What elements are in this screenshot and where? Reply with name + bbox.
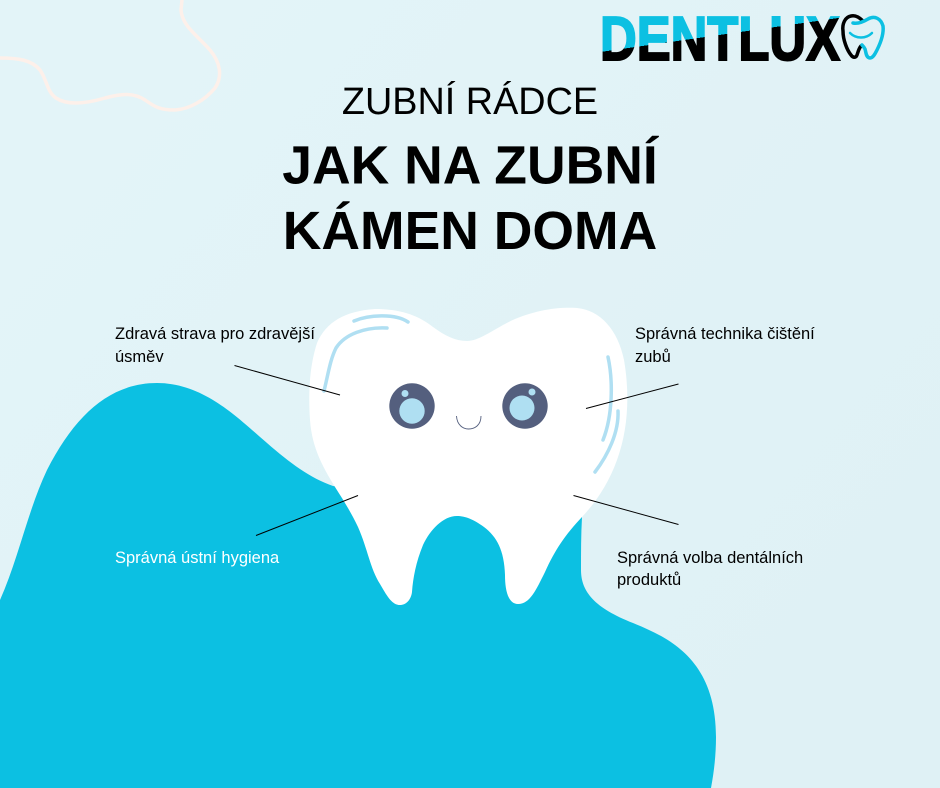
left eye (389, 383, 435, 429)
logo tooth icon (843, 16, 883, 58)
subtitle: ZUBNÍ RÁDCE (342, 81, 598, 123)
label: dental products: Správná volba dentálních (617, 549, 803, 567)
label: healthy diet (115, 325, 315, 366)
main title: KÁMEN DOMA (283, 201, 657, 261)
decorative floss curve (0, 0, 220, 110)
tooth character (309, 308, 627, 605)
label: healthy diet: Zdravá strava pro zdravější (115, 325, 315, 343)
label: brushing technique (635, 325, 815, 366)
label: healthy diet: úsměv (115, 348, 164, 366)
smile (456, 416, 481, 429)
main title: JAK NA ZUBNÍ (282, 136, 660, 196)
label: dental products (617, 549, 803, 589)
logo wordmark: DENTLUX (600, 5, 840, 74)
main title (282, 136, 660, 261)
label: oral hygiene: Správná ústní hygiena (115, 549, 280, 567)
right eye (502, 383, 548, 429)
leader lines (234, 366, 678, 536)
label: brushing technique: Správná technika čištění (635, 325, 815, 343)
label: brushing technique: zubů (635, 348, 671, 366)
tooth body (309, 308, 627, 605)
logo (600, 5, 883, 74)
label: dental products: produktů (617, 571, 681, 589)
tooth highlights (324, 316, 618, 472)
blue gum shape (0, 383, 716, 788)
